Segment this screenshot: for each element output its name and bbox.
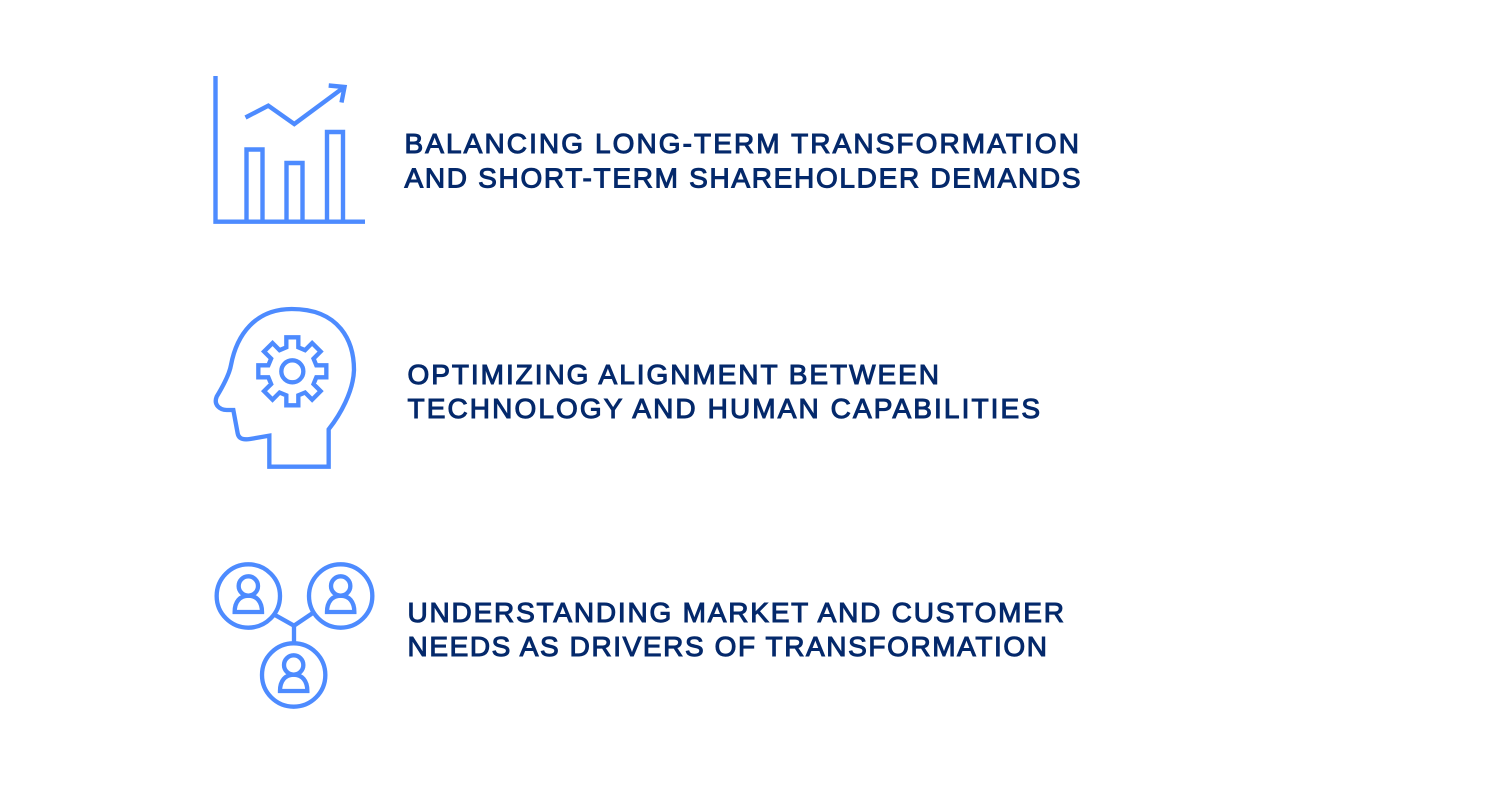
icon: bar chart with rising arrow [216,76,365,222]
text: understanding market and customer needs: UNDERSTANDING MARKET AND CUSTOMER [408,597,1064,628]
text: balancing transformation and shareholder demands: AND SHORT-TERM SHAREHOLDER DEMANDS [404,163,1080,194]
icon: connected people network [217,564,372,707]
text: balancing transformation and shareholder demands [404,128,1080,194]
text: optimizing alignment of technology and human capabilities: OPTIMIZING ALIGNMENT BETWEEN [408,359,939,390]
text: understanding market and customer needs: NEEDS AS DRIVERS OF TRANSFORMATION [408,631,1047,662]
icon: head with gear [216,309,354,467]
text: optimizing alignment of technology and human capabilities [408,359,1040,424]
text: balancing transformation and shareholder demands: BALANCING LONG-TERM TRANSFORMATION [404,128,1079,159]
text: understanding market and customer needs [408,597,1064,662]
text: optimizing alignment of technology and human capabilities: TECHNOLOGY AND HUMAN CAPABILITIES [408,393,1040,424]
